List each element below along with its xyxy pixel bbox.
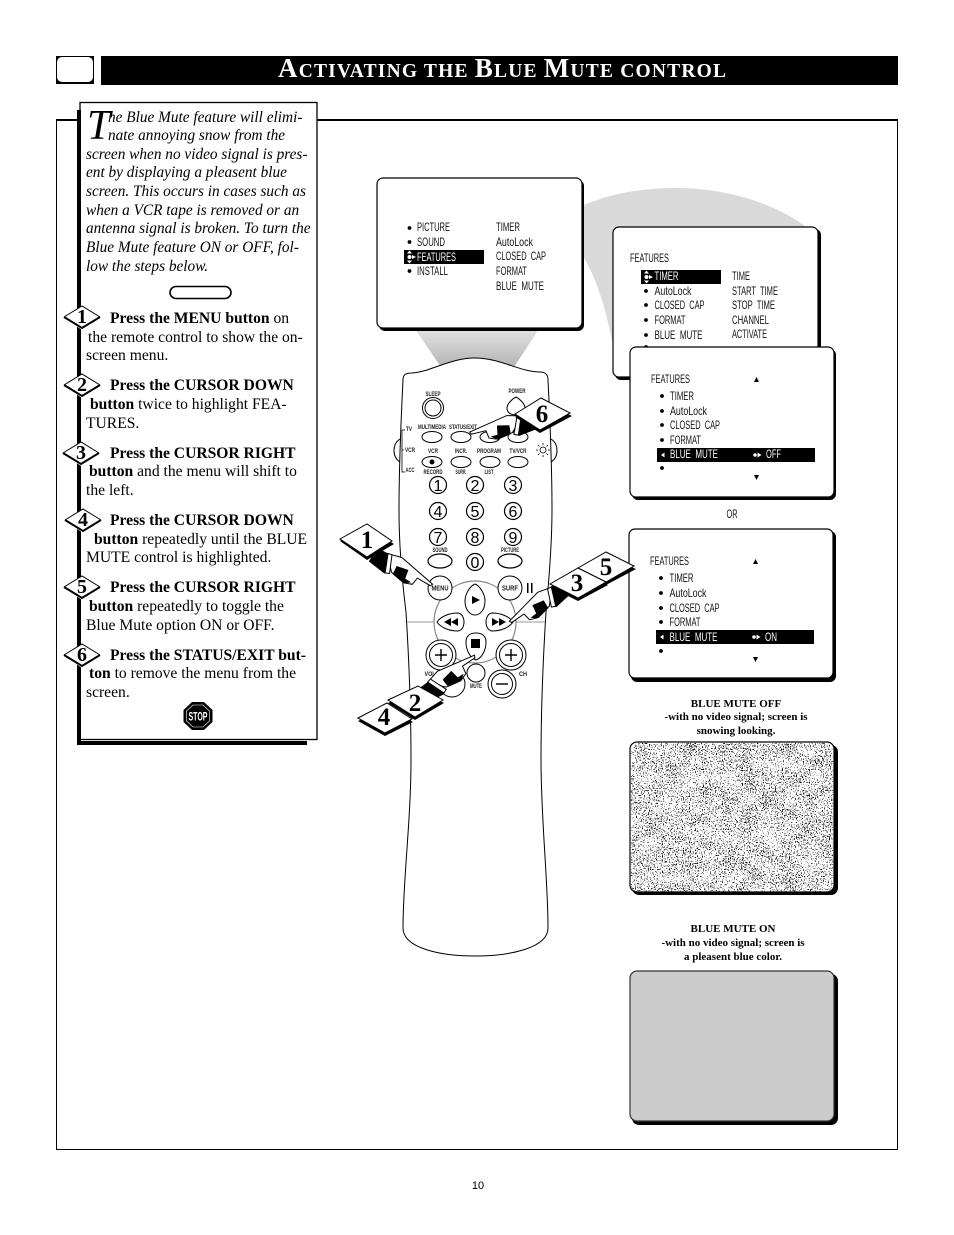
step 5 xyxy=(63,576,296,634)
badge: 1: 1 xyxy=(361,527,373,554)
step 4: Press the CURSOR DOWN xyxy=(110,512,295,529)
button labels: STATUS/EXIT xyxy=(449,425,477,431)
menu button xyxy=(428,576,452,600)
intro text: screen when no video signal is pres- xyxy=(86,146,307,163)
screen: features menu: CLOSED CAP xyxy=(654,298,704,312)
screen: blue mute on: CLOSED CAP xyxy=(670,601,720,615)
number keypad: 9 xyxy=(509,530,518,547)
screen: features menu: FEATURES xyxy=(630,251,669,265)
beam: remote to menu xyxy=(415,329,539,367)
screen: blue mute on: AutoLock xyxy=(670,586,707,600)
main frame xyxy=(56,120,898,1150)
icon: tv screen xyxy=(56,56,94,84)
sleep button xyxy=(422,392,444,418)
icon: stop sign xyxy=(184,702,212,730)
button labels: PROGRAM xyxy=(477,449,501,455)
screen: main menu: BLUE MUTE xyxy=(496,279,544,293)
sleep button: SLEEP xyxy=(426,392,440,398)
button labels: VCR xyxy=(428,449,439,455)
mode brackets: ACC xyxy=(406,468,415,474)
page number: 10 xyxy=(472,1180,484,1192)
step 2: button twice to highlight FEA- xyxy=(90,396,287,413)
step 1: screen menu. xyxy=(86,347,168,364)
step 6: 6 xyxy=(77,644,87,666)
screen: features menu: TIME xyxy=(732,269,750,283)
button labels: TV/VCR xyxy=(510,449,527,455)
number keypad: 2 xyxy=(471,478,480,495)
badge: 3 xyxy=(550,568,608,601)
screen: blue mute on: TIMER xyxy=(670,571,694,585)
remote body xyxy=(399,358,552,956)
intro text: when a VCR tape is removed or an xyxy=(86,202,299,219)
badge: 6 xyxy=(515,398,572,433)
cursor ring xyxy=(434,581,516,663)
intro text: he Blue Mute feature will elimi- xyxy=(108,109,302,126)
screen: main menu: AutoLock xyxy=(496,235,534,249)
button labels: SOUND xyxy=(432,548,448,554)
surf button: SURF xyxy=(502,586,519,592)
caption: blue mute on: -with no video signal; screen is xyxy=(661,937,805,949)
screen: blue mute on xyxy=(629,529,836,682)
step 1: Press the MENU button on xyxy=(110,310,289,327)
surf button xyxy=(498,576,532,600)
step 3 xyxy=(62,442,297,499)
intro text: ent by displaying a pleasent blue xyxy=(86,164,287,181)
step 5: 5 xyxy=(77,576,87,598)
screen: features menu: STOP TIME xyxy=(732,298,775,312)
hand: steps 2 and 4 xyxy=(415,650,483,705)
badge: 4 xyxy=(358,703,413,736)
button labels: LIST xyxy=(484,470,494,476)
caption: blue mute off: -with no video signal; screen is xyxy=(664,711,808,723)
caption: blue mute on: BLUE MUTE ON xyxy=(691,923,776,935)
screen: main menu: TIMER xyxy=(496,220,520,234)
screen: main menu: SOUND xyxy=(417,235,445,249)
button labels xyxy=(418,425,527,554)
menu button: MENU xyxy=(432,586,448,592)
hand: steps 3 and 5 xyxy=(506,577,572,635)
screen: blue mute on: BLUE MUTE xyxy=(670,630,718,644)
title: ACTIVATING THE BLUE MUTE CONTROL xyxy=(278,53,726,83)
intro text xyxy=(86,103,311,275)
screen: features menu: AutoLock xyxy=(654,284,692,298)
screen: main menu: INSTALL xyxy=(417,264,448,278)
step 4 xyxy=(64,509,307,566)
badge: 3: 3 xyxy=(571,570,583,597)
icon: stop sign: STOP xyxy=(188,712,208,724)
button labels: RECORD xyxy=(424,470,443,476)
number keypad: 7 xyxy=(434,530,443,547)
screen: blue mute off: CLOSED CAP xyxy=(670,418,720,432)
screen: main menu: PICTURE xyxy=(417,220,450,234)
intro text: Blue Mute feature ON or OFF, fol- xyxy=(86,239,299,256)
panel: instructions xyxy=(62,102,317,745)
volume labels: VOL xyxy=(424,671,436,678)
screen: main menu: CLOSED CAP xyxy=(496,249,546,263)
intro text: low the steps below. xyxy=(86,258,208,275)
caption: blue mute on xyxy=(661,923,805,963)
remote control xyxy=(394,358,557,956)
screen: features menu: START TIME xyxy=(732,284,778,298)
screen: features menu: TIMER xyxy=(654,269,679,283)
number keypad xyxy=(428,476,522,572)
screen: blue mute off: AutoLock xyxy=(670,404,708,418)
step 2 xyxy=(63,374,295,432)
screen: features menu: FORMAT xyxy=(654,313,686,327)
caption: blue mute off: BLUE MUTE OFF xyxy=(691,698,782,710)
screen: main menu xyxy=(377,178,584,331)
button labels: PICTURE xyxy=(501,548,519,554)
badge: 6: 6 xyxy=(536,401,548,428)
intro text: screen. This occurs in cases such as xyxy=(86,183,306,200)
step 2: Press the CURSOR DOWN xyxy=(110,377,295,394)
cursor buttons xyxy=(437,584,513,660)
button labels: SURR. xyxy=(456,470,467,476)
number keypad: 8 xyxy=(471,530,480,547)
step 4: MUTE control is highlighted. xyxy=(86,549,271,566)
caption: blue mute on: a pleasent blue color. xyxy=(684,951,782,963)
intro text: nate annoying snow from the xyxy=(108,127,285,144)
screen: blue mute on: ON xyxy=(765,630,777,644)
intro text: T xyxy=(87,103,113,149)
step 1: the remote control to show the on- xyxy=(88,329,303,346)
screen: features menu: CHANNEL xyxy=(732,313,769,327)
volume labels: MUTE xyxy=(470,684,482,690)
volume labels xyxy=(424,671,527,690)
label: or: OR xyxy=(726,507,738,521)
number keypad: 1 xyxy=(434,478,443,495)
number keypad: 6 xyxy=(509,504,518,521)
screen: features menu: ACTIVATE xyxy=(732,327,767,341)
step 5: Blue Mute option ON or OFF. xyxy=(86,617,274,634)
screen: blue mute off xyxy=(630,347,836,500)
screen: features menu xyxy=(613,227,821,380)
screen: blue mute off: OFF xyxy=(766,447,781,461)
badge: 2 xyxy=(388,686,444,720)
function buttons xyxy=(422,432,528,468)
mode brackets xyxy=(402,427,416,474)
volume labels: CH xyxy=(519,671,527,678)
step 3: 3 xyxy=(76,442,86,464)
screen: features menu: BLUE MUTE xyxy=(654,328,702,342)
button labels: INCR. xyxy=(455,449,467,455)
screen: blue mute off: FEATURES xyxy=(651,372,690,386)
step 4: button repeatedly until the BLUE xyxy=(94,531,307,548)
badge: 4: 4 xyxy=(378,704,391,731)
step 3: the left. xyxy=(86,482,134,499)
screen: blue xyxy=(630,971,838,1125)
number keypad: 0 xyxy=(471,555,480,572)
badge: 5: 5 xyxy=(600,554,612,581)
caption: blue mute off xyxy=(664,698,808,737)
screen: main menu: FORMAT xyxy=(496,264,527,278)
step 3: Press the CURSOR RIGHT xyxy=(110,445,296,462)
volume and channel buttons xyxy=(426,640,526,698)
badge: 5 xyxy=(578,552,636,585)
step 3: button and the menu will shift to xyxy=(89,463,297,480)
step 2: 2 xyxy=(77,374,87,396)
step 5: button repeatedly to toggle the xyxy=(89,598,284,615)
screen: blue mute on: FORMAT xyxy=(670,615,701,629)
step 1 xyxy=(63,306,303,364)
screen: blue mute off: BLUE MUTE xyxy=(670,447,718,461)
icon: sun indicator xyxy=(536,443,550,457)
mode brackets: TV xyxy=(406,427,412,433)
step 6 xyxy=(63,644,306,701)
icon: pill button xyxy=(170,286,231,298)
power button xyxy=(507,389,526,415)
screen: blue mute off: FORMAT xyxy=(670,433,701,447)
screen: blue mute off: TIMER xyxy=(670,389,694,403)
hand: step 1 xyxy=(368,544,436,598)
mode brackets: VCR xyxy=(405,448,416,454)
step 6: screen. xyxy=(86,684,130,701)
step 4: 4 xyxy=(78,509,88,531)
power button: POWER xyxy=(508,389,526,395)
step 6: ton to remove the menu from the xyxy=(89,665,296,682)
step 5: Press the CURSOR RIGHT xyxy=(110,579,296,596)
step 2: TURES. xyxy=(86,415,139,432)
screen: snow xyxy=(630,742,838,895)
title bar xyxy=(101,53,898,85)
screen: main menu: FEATURES xyxy=(417,250,456,264)
hand: step 6 xyxy=(468,409,538,448)
number keypad: 3 xyxy=(509,478,518,495)
caption: blue mute off: snowing looking. xyxy=(697,725,776,737)
number keypad: 5 xyxy=(471,504,480,521)
badge: 2: 2 xyxy=(409,690,421,717)
number keypad: 4 xyxy=(434,504,443,521)
swoosh: menu projection xyxy=(552,188,822,345)
step 6: Press the STATUS/EXIT but- xyxy=(110,647,306,664)
step 1: 1 xyxy=(77,306,87,328)
button labels: MULTIMEDIA xyxy=(418,425,446,431)
badge: 1 xyxy=(340,524,394,560)
screen: blue mute on: FEATURES xyxy=(650,554,689,568)
intro text: antenna signal is broken. To turn the xyxy=(86,220,311,237)
